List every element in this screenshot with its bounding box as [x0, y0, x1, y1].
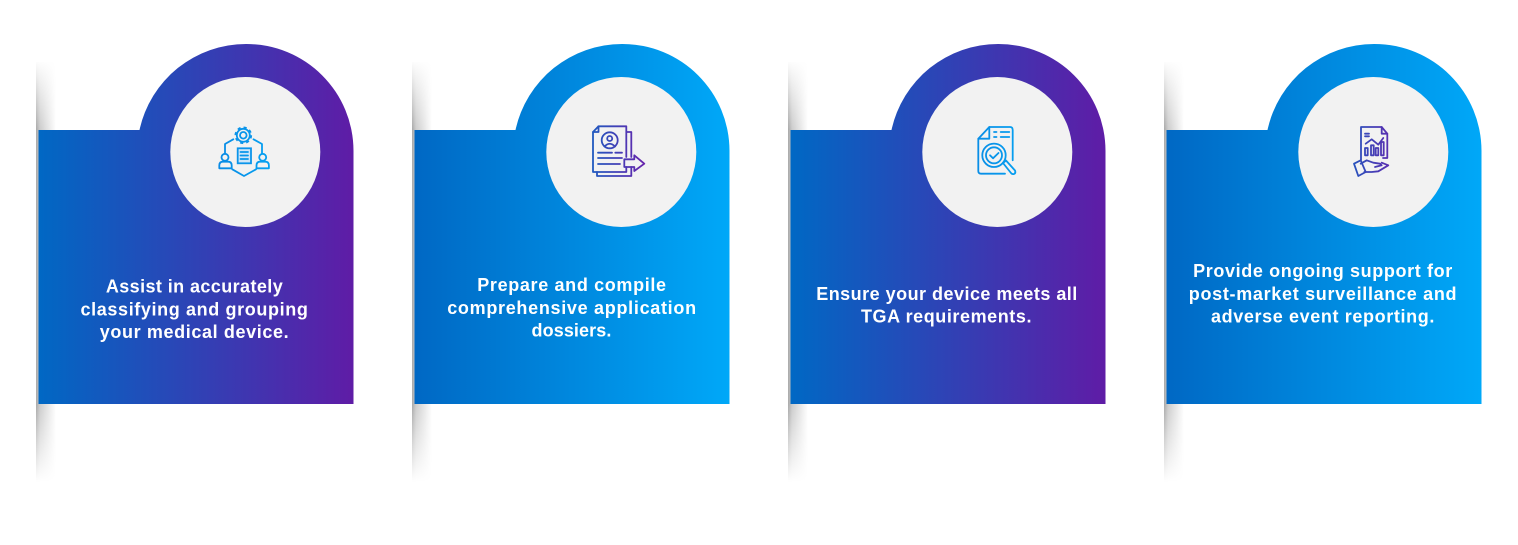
card 2 icon circle	[546, 77, 696, 227]
card 2 arch panel	[414, 44, 730, 404]
card 2 text: comprehensive application	[447, 298, 697, 318]
card 1: classify and group	[36, 44, 354, 482]
card 2 text: dossiers.	[532, 320, 611, 340]
card 4 text: adverse event reporting.	[1211, 306, 1435, 326]
card 1 arch panel	[38, 44, 354, 404]
card 4 icon circle	[1298, 77, 1448, 227]
icon: report on open hand	[1354, 127, 1388, 176]
card 1 text: your medical device.	[100, 322, 289, 342]
card 3 text: TGA requirements.	[861, 306, 1032, 326]
card 1 icon circle	[170, 77, 320, 227]
card 2 shadow	[412, 60, 432, 482]
card 4 text: Provide ongoing support for	[1193, 261, 1453, 281]
card 2: application dossiers	[412, 44, 730, 482]
icon: document with magnifier check	[978, 127, 1015, 174]
card 1 text: classifying and grouping	[81, 300, 308, 320]
icon: team and document network	[219, 128, 269, 176]
card 3 shadow	[788, 60, 808, 482]
card 1 shadow	[36, 60, 56, 482]
card 2 text: Prepare and compile	[477, 275, 667, 295]
card 4 arch panel	[1166, 44, 1482, 404]
card 4 shadow	[1164, 60, 1184, 482]
icon: profile document with arrow	[593, 126, 644, 176]
card 4: post-market support	[1164, 44, 1482, 482]
card 3 icon circle	[922, 77, 1072, 227]
card 1 text: Assist in accurately	[106, 276, 283, 296]
card 4 text: post-market surveillance and	[1189, 284, 1457, 304]
card 3 arch panel	[790, 44, 1106, 404]
card 3: TGA requirements	[788, 44, 1106, 482]
card 3 text: Ensure your device meets all	[816, 284, 1078, 304]
